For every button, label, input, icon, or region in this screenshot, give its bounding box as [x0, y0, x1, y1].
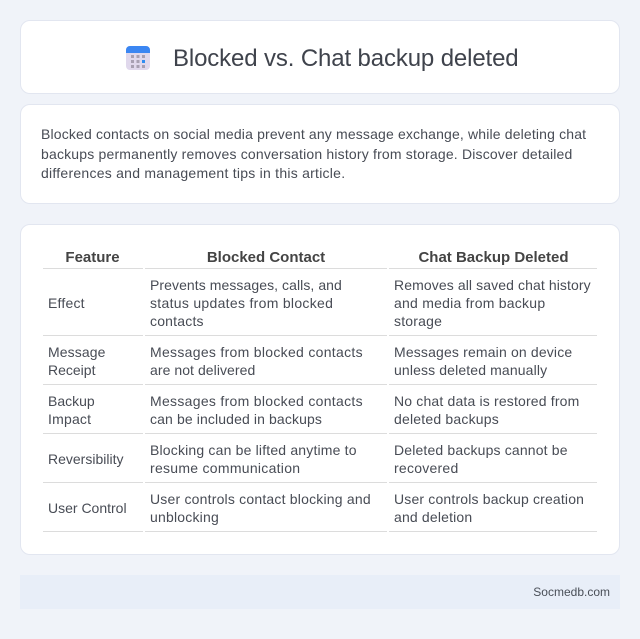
row: Backup Impact: Impact	[48, 411, 91, 427]
row: Message Receipt: Messages remain on device	[394, 344, 572, 360]
row: User Control: User controls backup creation	[394, 491, 584, 507]
row: User Control: unblocking	[150, 509, 219, 525]
panel: comparison table	[20, 224, 620, 555]
table header: Chat Backup Deleted	[418, 249, 569, 266]
row: Message Receipt: are not delivered	[150, 362, 255, 378]
row: User Control: User Control	[48, 500, 127, 516]
row: Reversibility: recovered	[394, 460, 459, 476]
row: User Control: and deletion	[394, 509, 472, 525]
row: Message Receipt: Messages from blocked contacts	[150, 344, 363, 360]
row: Backup Impact: can be included in backups	[150, 411, 322, 427]
row: Message Receipt: Message	[48, 344, 106, 360]
row: Effect: Removes all saved chat history	[394, 277, 591, 293]
row: Effect: storage	[394, 313, 442, 329]
row: Effect: Prevents messages, calls, and	[150, 277, 342, 293]
row: Reversibility: resume communication	[150, 460, 300, 476]
table header: Feature	[65, 249, 120, 266]
row: User Control	[48, 491, 584, 525]
text block: intro	[41, 126, 586, 181]
panel: intro text	[20, 104, 620, 204]
row: Reversibility: Blocking can be lifted anytime to	[150, 442, 357, 458]
row: Backup Impact	[48, 393, 579, 427]
panel: title	[20, 20, 620, 94]
row: Message Receipt	[48, 344, 572, 378]
row: Message Receipt: Receipt	[48, 362, 95, 378]
heading: Blocked vs. Chat backup deleted	[173, 45, 519, 72]
text block: intro: differences and management tips in this article.	[41, 165, 345, 181]
row: Backup Impact: Backup	[48, 393, 95, 409]
icon: calendar	[126, 46, 150, 70]
row: Backup Impact: deleted backups	[394, 411, 499, 427]
table header: Blocked Contact	[207, 249, 325, 266]
row: Effect: contacts	[150, 313, 204, 329]
row: Reversibility: Deleted backups cannot be	[394, 442, 568, 458]
row: Effect: Effect	[48, 295, 85, 311]
row: Reversibility	[48, 442, 568, 476]
row: Reversibility: Reversibility	[48, 451, 123, 467]
text block: intro: backups permanently removes conversation history from storage. Discover detailed	[41, 146, 572, 162]
row: User Control: User controls contact blocking and	[150, 491, 371, 507]
table header	[65, 249, 569, 266]
row: Backup Impact: Messages from blocked contacts	[150, 393, 363, 409]
row: Effect: status updates from blocked	[150, 295, 333, 311]
text block: intro: Blocked contacts on social media prevent any message exchange, while deleting chat	[41, 126, 586, 142]
row: Message Receipt: unless deleted manually	[394, 362, 547, 378]
row: Effect: and media from backup	[394, 295, 545, 311]
footer bar	[20, 575, 620, 609]
row: Effect	[48, 277, 591, 329]
footer text: Socmedb.com	[533, 585, 610, 599]
row: Backup Impact: No chat data is restored from	[394, 393, 579, 409]
